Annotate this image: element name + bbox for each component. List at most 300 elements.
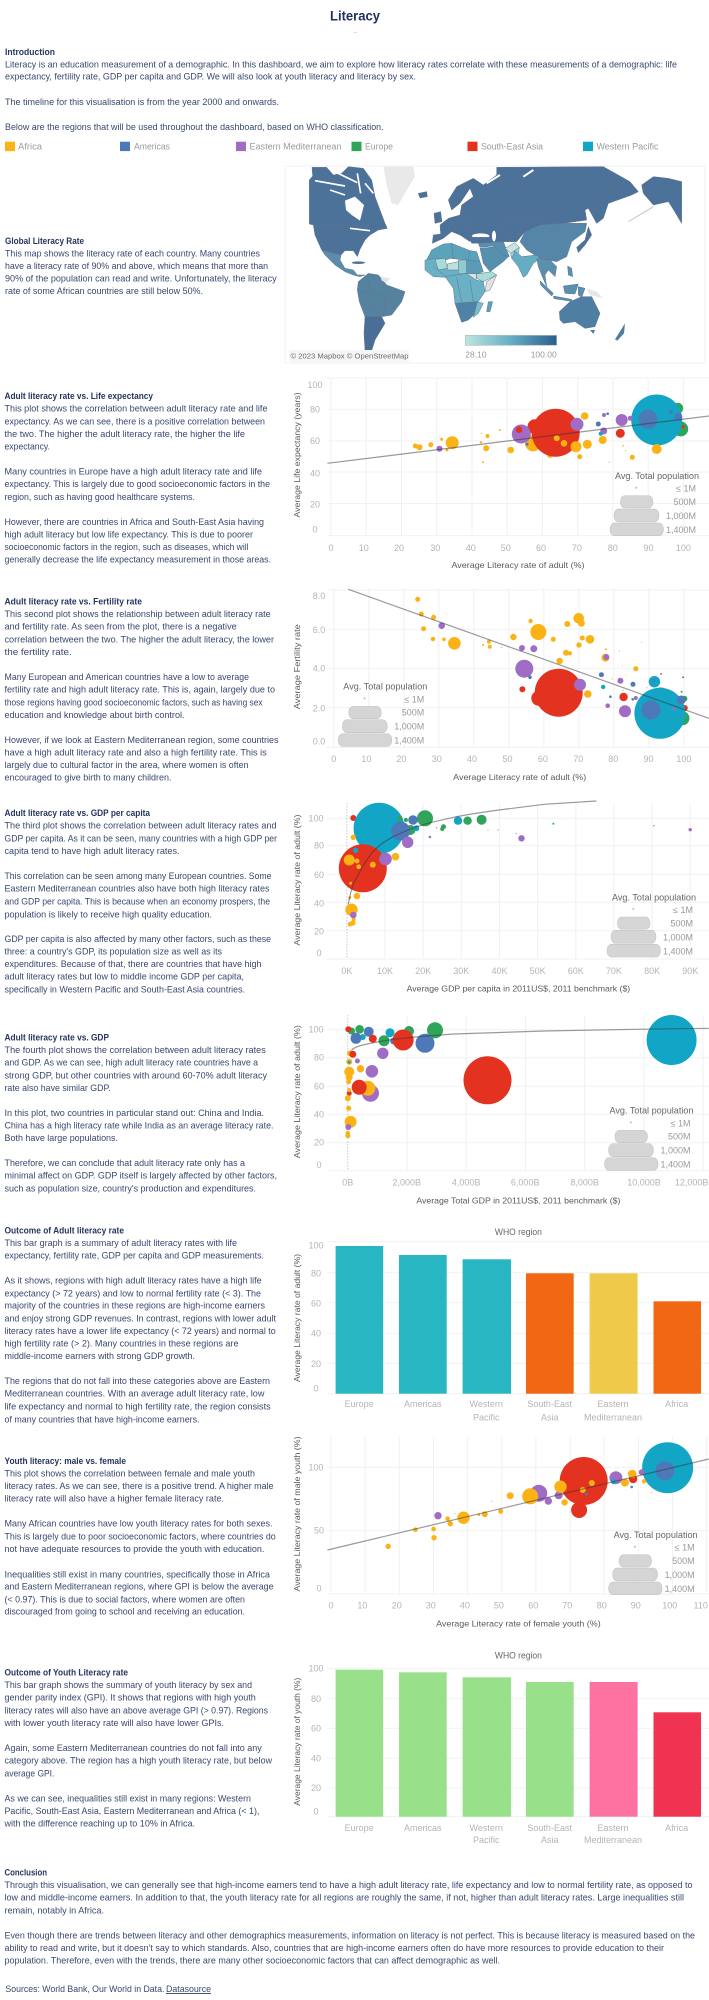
size legend <box>338 682 427 746</box>
text block: introduction: Below are the regions that will be used throughout the dashboard, based on WHO classification. <box>5 121 384 132</box>
x axis labels: 2,000B <box>393 1178 421 1188</box>
y axis labels: 40 <box>311 1328 321 1338</box>
category labels: Western <box>470 1823 503 1833</box>
text block: This bar graph is a summary of adult literacy rates with life <box>4 1237 237 1248</box>
x axis labels <box>331 754 691 764</box>
y axis labels: 8.0 <box>313 591 325 601</box>
text block: Mediterranean countries. With an average adult literacy rate, low <box>4 1388 265 1399</box>
chart header: WHO region <box>495 1651 542 1661</box>
size legend: 1,000M <box>665 1570 695 1580</box>
text block: category above. The region has a high youth literacy rate, but below <box>4 1755 272 1766</box>
size legend <box>604 1106 694 1170</box>
trend curve <box>348 801 596 904</box>
trend line <box>327 416 709 463</box>
x axis labels: 70 <box>573 754 583 764</box>
text block: literacy rates have a lower life expectancy (< 72 years) and normal to <box>4 1325 276 1336</box>
x axis labels: 10 <box>359 543 369 553</box>
size legend: 1,400M <box>663 946 693 956</box>
x axis labels: 90 <box>643 754 654 764</box>
category labels: Europe <box>345 1399 374 1409</box>
x axis labels: 40 <box>467 754 477 764</box>
y axis labels <box>308 813 324 958</box>
size legend: Avg. Total population <box>343 682 427 692</box>
text block: and GDP. As we can see, high adult literacy rate countries have a <box>4 1057 259 1068</box>
bubble chart: literacy vs GDP per capita <box>292 801 709 994</box>
text block: of many countries that have high-income earners. <box>4 1413 200 1424</box>
axis title: y: Average Fertility rate <box>292 624 302 709</box>
text block: Both have large populations. <box>4 1132 118 1143</box>
x axis labels <box>341 966 698 976</box>
size legend: Avg. Total population <box>610 1106 694 1116</box>
category labels: Africa <box>665 1823 688 1833</box>
size legend: Avg. Total population <box>614 1530 698 1540</box>
sources: Datasource <box>166 1983 211 1994</box>
y axis labels: 60 <box>311 1299 321 1309</box>
text block: encouraged to give birth to many children. <box>4 772 172 783</box>
size legend: 1,400M <box>666 525 696 535</box>
x axis labels: 0 <box>328 543 334 553</box>
y axis labels: 0 <box>316 1583 322 1593</box>
text block: China has a high literacy rate while India as an average literacy rate. <box>4 1120 274 1131</box>
axis title: y: Average Literacy rate of youth (%) <box>292 1678 302 1806</box>
text block: introduction <box>5 58 677 132</box>
x axis labels: 0B <box>342 1178 353 1188</box>
panel: youth literacy text <box>4 1455 276 1617</box>
text block: specifically in Western Pacific and South-East Asia countries. <box>4 983 245 994</box>
panel: conclusion <box>4 1866 695 1966</box>
trend line <box>327 1459 709 1550</box>
text block: As it shows, regions with high adult literacy rates have a high life <box>4 1275 262 1286</box>
size legend: 500M <box>668 1132 690 1142</box>
size legend: 1,000M <box>660 1146 690 1156</box>
text block: This bar graph shows the summary of youth literacy by sex and <box>4 1679 252 1690</box>
heading: introduction: Introduction <box>5 46 55 57</box>
text block <box>4 820 277 994</box>
text block: Therefore, we can conclude that adult literacy rate only has a <box>4 1157 246 1168</box>
bubble chart: literacy vs fertility <box>292 588 709 782</box>
category labels <box>345 1823 688 1845</box>
text block: literacy rate will also have a higher female literacy rate. <box>4 1493 224 1504</box>
text block: This second plot shows the relationship between adult literacy rate <box>4 608 271 619</box>
y axis labels: 60 <box>314 1081 324 1091</box>
x axis labels: 70K <box>606 966 622 976</box>
text block: three: a country's GDP, its population size as well as its <box>4 945 222 956</box>
size legend: 1,000M <box>666 511 696 521</box>
text block: region, such as having good healthcare systems. <box>4 491 195 502</box>
y axis labels <box>307 380 323 535</box>
text block: expectancy (> 72 years) and low to normal fertility rate (< 3). The <box>4 1287 261 1298</box>
text block: with lower youth literacy rate will also have lower GPIs. <box>4 1717 224 1728</box>
x axis labels <box>342 1178 708 1188</box>
x axis labels: 50 <box>502 754 513 764</box>
text block: introduction: The timeline for this visualisation is from the year 2000 and onwards. <box>5 96 279 107</box>
x axis labels: 50K <box>530 966 546 976</box>
panel: adult literacy vs fertility text <box>4 596 279 783</box>
y axis labels: 60 <box>311 1723 321 1733</box>
text block: GDP per capita. As it can be seen, many countries with a high GDP per <box>4 832 277 843</box>
y axis labels: 20 <box>310 500 320 510</box>
category labels: Asia <box>541 1835 558 1845</box>
category labels: Western <box>470 1399 503 1409</box>
axis title: x: Average Literacy rate of adult (%) <box>453 772 586 782</box>
x axis labels: 20 <box>392 1600 402 1610</box>
text block: literacy rates will also have an above average GPI (> 0.97). Regions <box>4 1704 268 1715</box>
map colour legend: 100.00 <box>531 350 557 360</box>
map colour legend <box>465 335 557 360</box>
bars <box>336 1670 701 1817</box>
text block: However, there are countries in Africa and South-East Asia having <box>4 516 264 527</box>
choropleth map: literacy rate by country <box>285 166 705 363</box>
y axis labels: 40 <box>314 1109 324 1119</box>
y axis labels: 20 <box>311 1783 321 1793</box>
legend: WHO regions: Americas <box>134 142 170 152</box>
x axis labels: 30 <box>430 543 440 553</box>
text block: minimal affect on GDP. GDP itself is largely affected by other factors, <box>4 1170 277 1181</box>
text block: This plot shows the correlation between adult literacy rate and life <box>4 403 268 414</box>
text block: expectancy, fertility rate, GDP per capita and GDP measurements. <box>4 1249 264 1260</box>
category labels: Americas <box>404 1823 442 1833</box>
text block: high fertility rate (> 2). Many countries in these regions are <box>4 1337 238 1348</box>
y axis labels: 20 <box>311 1359 321 1369</box>
y axis labels <box>308 1241 324 1394</box>
size legend: ≤ 1M <box>404 694 424 704</box>
bar chart: adult literacy by WHO region <box>292 1227 709 1422</box>
y axis labels: 100 <box>308 1025 324 1035</box>
x axis labels: 0 <box>328 1600 334 1610</box>
size legend <box>610 471 699 536</box>
x axis labels: 8,000B <box>570 1178 599 1188</box>
heading: Adult literacy rate vs. Fertility rate <box>4 596 142 607</box>
y axis labels: 100 <box>307 380 323 390</box>
text block: expectancy. <box>4 440 50 451</box>
size legend: Avg. Total population <box>615 471 699 481</box>
text block: The regions that do not fall into these categories above are Eastern <box>4 1375 270 1386</box>
size legend: ≤ 1M <box>673 905 693 915</box>
legend: WHO regions <box>5 142 659 152</box>
y axis labels: 0 <box>316 948 322 958</box>
text block: and fertility rate. As seen from the plot, there is a negative <box>4 621 237 632</box>
text block: conclusion: Through this visualisation, we can generally see that high-income earners tend to have a high adult literacy rate, life expectancy and low to normal fertility rate, as opposed to <box>4 1879 692 1890</box>
text block: Many European and American countries have a low to average <box>4 671 249 682</box>
x axis labels: 10K <box>377 966 393 976</box>
y axis labels: 80 <box>314 1053 324 1063</box>
axis title: x: Average Total GDP in 2011US$, 2011 benchmark ($) <box>416 1195 621 1205</box>
heading: Adult literacy rate vs. GDP <box>4 1031 109 1042</box>
text block: Pacific, South-East Asia, Eastern Mediterranean and Africa (< 1), <box>4 1805 259 1816</box>
x axis labels: 20 <box>396 754 406 764</box>
size legend: 1,000M <box>663 932 693 942</box>
text block <box>4 1467 276 1617</box>
x axis labels: 100 <box>676 543 691 553</box>
size legend: ≤ 1M <box>671 1118 690 1128</box>
text block <box>4 403 271 565</box>
x axis labels: 90 <box>631 1600 641 1610</box>
panel: adult literacy vs GDP text <box>4 1031 277 1193</box>
size legend: 500M <box>673 497 696 507</box>
text block: This correlation can be seen among many European countries. Some <box>4 870 272 881</box>
size legend: 1,400M <box>394 736 424 746</box>
trend curve <box>352 1028 709 1050</box>
trend line <box>348 589 709 718</box>
x axis labels: 50 <box>494 1600 504 1610</box>
axis title: y: Average Literacy rate of adult (%) <box>292 814 302 946</box>
axis title: x: Average Literacy rate of adult (%) <box>452 560 585 570</box>
text block: conclusion: population. Therefore, even with the trends, there are many other socioeconomic factors that can affect demographic as well. <box>4 1955 500 1966</box>
heading: Adult literacy rate vs. GDP per capita <box>4 807 151 818</box>
y axis labels <box>308 1025 324 1170</box>
y axis labels: 40 <box>311 1753 321 1763</box>
x axis labels: 20 <box>394 543 404 553</box>
text block <box>4 1044 277 1193</box>
axis title: x: Average Literacy rate of female youth (%) <box>436 1619 601 1629</box>
x axis labels: 80 <box>597 1600 607 1610</box>
axis title: y: Average Literacy rate of adult (%) <box>292 1254 302 1382</box>
heading: Adult literacy rate vs. Life expectancy <box>4 390 154 401</box>
text block: education and knowledge about birth control. <box>4 709 184 720</box>
legend: WHO regions: Europe <box>365 142 393 152</box>
category labels: Mediterranean <box>584 1412 642 1422</box>
axis title: y: Average Literacy rate of adult (%) <box>292 1025 302 1158</box>
heading: Outcome of Adult literacy rate <box>4 1224 124 1235</box>
size legend: 500M <box>672 1556 695 1566</box>
size legend: Avg. Total population <box>612 892 696 902</box>
size legend <box>607 892 696 957</box>
category labels <box>345 1399 688 1422</box>
x axis labels: 80 <box>608 543 618 553</box>
heading: Outcome of Youth Literacy rate <box>4 1666 128 1677</box>
category labels: Mediterranean <box>584 1835 642 1845</box>
y axis labels: 0 <box>312 525 318 535</box>
legend: WHO regions: Western Pacific <box>596 142 659 152</box>
text block: Again, some Eastern Mediterranean countries do not fall into any <box>4 1742 262 1753</box>
y axis labels: 80 <box>310 405 320 415</box>
x axis labels: 40K <box>491 966 508 976</box>
x axis labels: 0K <box>341 966 352 976</box>
text block: correlation between the two. The higher the adult literacy, the lower <box>4 633 274 644</box>
y axis labels: 80 <box>311 1268 321 1278</box>
text block: and GDP per capita. This is because when an economy prospers, the <box>4 895 270 906</box>
panel: introduction <box>5 46 677 132</box>
bubble chart: female vs male youth literacy <box>292 1436 709 1629</box>
y axis labels: 2.0 <box>313 703 325 713</box>
x axis labels: 10 <box>361 754 371 764</box>
x axis labels: 90 <box>643 543 654 553</box>
y axis labels: 50 <box>314 1526 324 1536</box>
x axis labels: 60 <box>538 754 548 764</box>
y axis labels: 40 <box>314 898 324 908</box>
text block: with the difference reaching up to 10% in Africa. <box>4 1818 195 1829</box>
x axis labels: 10 <box>357 1600 367 1610</box>
text block: GDP per capita is also affected by many other factors, such as these <box>4 933 271 944</box>
text block: global literacy rate <box>5 248 277 296</box>
x axis labels <box>328 543 691 553</box>
text block: global literacy rate: This map shows the literacy rate of each country. Many countries <box>5 248 260 259</box>
text block: expectancy. As we can see, there is a positive correlation between <box>4 415 265 426</box>
y axis labels: 100 <box>308 1462 324 1472</box>
bubbles <box>386 1442 693 1549</box>
panel: outcome of adult literacy text <box>4 1224 276 1424</box>
x axis labels: 80K <box>644 966 660 976</box>
text block: introduction: expectancy, fertility rate, GDP per capita and GDP. We will also look at youth literacy and literacy by sex. <box>5 71 416 82</box>
text block: largely due to cultural factor in the area, where women is often <box>4 759 248 770</box>
x axis labels: 60 <box>536 543 546 553</box>
text block: gender parity index (GPI). It shows that regions with high youth <box>4 1692 256 1703</box>
x axis labels: 30 <box>426 1600 436 1610</box>
title: Literacy <box>330 8 380 24</box>
x axis labels: 10,000B <box>627 1178 661 1188</box>
y axis labels: 0 <box>313 1807 319 1817</box>
x axis labels: 70 <box>572 543 582 553</box>
x axis labels: 6,000B <box>511 1178 539 1188</box>
text block: Many countries in Europe have a high adult literacy rate and life <box>4 465 262 476</box>
text block: conclusion: low and middle-income earners. In addition to that, the youth literacy rate for all regions are roughly the same, if not, higher than adult literacy rates. Large inequalities still <box>4 1892 684 1903</box>
y axis labels: 20 <box>314 927 324 937</box>
text block: In this plot, two countries in particular stand out: China and India. <box>4 1107 264 1118</box>
text block: socioeconomic factors in the region, such as diseases, which will <box>4 541 248 552</box>
text block: rate also have similar GDP. <box>4 1082 111 1093</box>
y axis labels: 4.0 <box>313 663 325 673</box>
text block: The third plot shows the correlation between adult literacy rates and <box>4 820 276 831</box>
x axis labels: 100 <box>676 754 691 764</box>
y axis labels: 100 <box>308 813 324 823</box>
x axis labels: 50 <box>501 543 511 553</box>
x axis labels: 60 <box>528 1600 538 1610</box>
axis title: x: Average GDP per capita in 2011US$, 2011 benchmark ($) <box>407 984 630 994</box>
text block: Inequalities still exist in many countries, specifically those in Africa <box>4 1568 271 1579</box>
y axis labels: 20 <box>314 1138 324 1148</box>
y axis labels: 60 <box>314 870 324 880</box>
bubbles <box>344 1015 697 1138</box>
panel: adult literacy vs life expectancy text <box>4 390 271 565</box>
text block: conclusion: Even though there are trends between literacy and other demographics measurements, information on literacy is not perfect. This is because literacy is measured based on the <box>4 1929 695 1940</box>
text block: average GPI. <box>4 1767 54 1778</box>
size legend: 1,000M <box>394 722 424 732</box>
chart header: WHO region <box>495 1227 542 1237</box>
x axis labels: 80 <box>608 754 618 764</box>
text block: global literacy rate: 90% of the population can read and write. Unfortunately, the literacy <box>5 272 277 283</box>
text block: expectancy. This is largely due to good socioeconomic factors in the <box>4 478 270 489</box>
size legend: ≤ 1M <box>676 484 696 494</box>
text block: (< 0.97). This is due to social factors, where women are often <box>4 1593 245 1604</box>
y axis labels <box>313 591 325 747</box>
map attribution: © 2023 Mapbox © OpenStreetMap <box>290 352 408 360</box>
y axis labels: 80 <box>311 1694 321 1704</box>
text block <box>4 1679 272 1829</box>
panel: outcome of youth literacy text <box>4 1666 272 1829</box>
x axis labels: 0 <box>331 754 336 764</box>
x axis labels: 40 <box>466 543 476 553</box>
y axis labels: 100 <box>308 1663 324 1673</box>
x axis labels <box>328 1600 708 1610</box>
x axis labels: 110 <box>694 1600 708 1610</box>
heading: global literacy rate: Global Literacy Rate <box>5 235 84 246</box>
text block: the two. The higher the adult literacy rate, the higher the life <box>4 428 245 439</box>
bubbles <box>415 597 690 739</box>
text block: discouraged from going to school and receiving an education. <box>4 1606 245 1617</box>
text block: generally decrease the life expectancy measurement in those areas. <box>4 554 271 565</box>
y axis labels: 0 <box>316 1160 322 1170</box>
legend: WHO regions: Africa <box>18 142 42 152</box>
y axis labels: 6.0 <box>313 625 325 635</box>
category labels: South-East <box>527 1399 572 1409</box>
text block: literacy rates. As we can see, there is a positive trend. A higher male <box>4 1480 274 1491</box>
text block: population is likely to receive high quality education. <box>4 908 212 919</box>
bar chart: youth literacy by WHO region <box>292 1651 709 1845</box>
size legend: 500M <box>402 708 424 718</box>
text block: life expectancy and normal to high fertility rate, the region consists <box>4 1400 271 1411</box>
text block: not have adequate resources to provide the youth with education. <box>4 1543 264 1554</box>
text block: expenditures. Because of that, there are countries that have high <box>4 958 262 969</box>
text block: and enjoy strong GDP revenues. In contrast, regions with lower adult <box>4 1312 276 1323</box>
category labels: Europe <box>345 1823 374 1833</box>
text block: fertility rate and high adult literacy rate. This is, again, largely due to <box>4 684 275 695</box>
text block: middle-income earners with strong GDP growth. <box>4 1350 195 1361</box>
y axis labels: 80 <box>314 841 324 851</box>
category labels: Pacific <box>473 1835 500 1845</box>
text block: However, if we look at Eastern Mediterranean region, some countries <box>4 734 279 745</box>
text block: conclusion: remain, notably in Africa. <box>4 1904 104 1915</box>
text block: high adult literacy but low life expectancy. This is due to poorer <box>4 529 253 540</box>
text block: those regions having good socioeconomic factors, such as having sex <box>4 696 263 707</box>
x axis labels: 100 <box>662 1600 677 1610</box>
text block <box>4 608 279 783</box>
text block <box>4 1237 276 1424</box>
bubble chart: literacy vs GDP <box>292 1015 709 1205</box>
y axis labels: 0.0 <box>313 737 325 747</box>
text block: global literacy rate: have a literacy rate of 90% and above, which means that more than <box>5 260 268 271</box>
x axis labels: 12,000B <box>675 1178 708 1188</box>
panel: adult literacy vs GDP per capita text <box>4 807 277 994</box>
y axis labels <box>308 1462 324 1593</box>
axis title: y: Average Life expectancy (years) <box>292 392 302 518</box>
y axis labels: 0 <box>313 1384 319 1394</box>
size legend: 500M <box>670 918 693 928</box>
map colour legend: 28.10 <box>465 350 487 360</box>
text block: and Eastern Mediterranean regions, where GPI is below the average <box>4 1581 274 1592</box>
text block: the fertility rate. <box>4 646 72 657</box>
x axis labels: 70 <box>562 1600 572 1610</box>
axis title: y: Average Literacy rate of male youth (%) <box>292 1436 302 1592</box>
size legend: ≤ 1M <box>675 1543 695 1553</box>
x axis labels: 40 <box>460 1600 470 1610</box>
heading: conclusion: Conclusion <box>4 1866 47 1877</box>
category labels: Africa <box>665 1399 688 1409</box>
text block: conclusion <box>4 1879 695 1966</box>
bars <box>336 1246 701 1394</box>
text block: adult literacy rates but low to middle income GDP per capita, <box>4 971 244 982</box>
y axis labels: 60 <box>310 436 320 446</box>
heading: Youth literacy: male vs. female <box>4 1455 126 1466</box>
category labels: South-East <box>527 1823 572 1833</box>
panel: global literacy rate <box>5 235 277 296</box>
y axis labels <box>308 1663 324 1817</box>
text block: The fourth plot shows the correlation between adult literacy rates <box>4 1044 266 1055</box>
text block: This is largely due to poor socioeconomic factors, where countries do <box>4 1530 276 1541</box>
x axis labels: 4,000B <box>452 1178 480 1188</box>
x axis labels: 30 <box>432 754 442 764</box>
text block: global literacy rate: rate of some African countries are still below 50%. <box>5 285 203 296</box>
size legend: 1,400M <box>660 1160 690 1170</box>
text block: Eastern Mediterranean countries also have both high literacy rates <box>4 883 270 894</box>
text block: such as population size, country's production and expenditures. <box>4 1182 256 1193</box>
x axis labels: 90K <box>682 966 698 976</box>
bubbles <box>339 803 692 927</box>
text block: This plot shows the correlation between female and male youth <box>4 1467 255 1478</box>
text block: capita tend to have high adult literacy rates. <box>4 845 180 856</box>
legend: WHO regions: South-East Asia <box>481 142 543 152</box>
sources: Sources: World Bank, Our World in Data. <box>5 1983 164 1994</box>
x axis labels: 30K <box>453 966 469 976</box>
